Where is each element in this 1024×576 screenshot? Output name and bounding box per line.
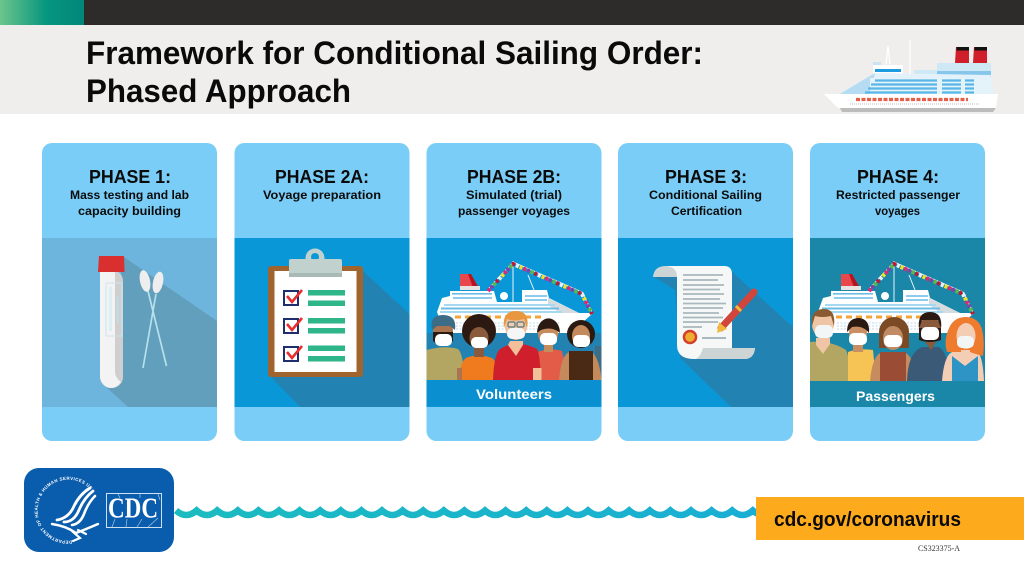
label band: volunteers: Volunteers <box>476 386 552 402</box>
label band: passengers: Passengers <box>856 388 935 404</box>
person: rust dress <box>870 317 916 381</box>
document code: CS323375-A <box>918 544 960 553</box>
title: Framework for Conditional Sailing Order: <box>86 35 703 71</box>
website callout: cdc.gov/coronavirus <box>774 509 961 531</box>
person: red curly hair <box>942 317 984 381</box>
description: phase 1 <box>70 190 189 218</box>
person: navy shirt <box>907 312 950 381</box>
illustration: cruise ship with flags <box>818 261 974 333</box>
description: phase 3 <box>649 190 762 218</box>
illustration: masked volunteers <box>426 311 602 380</box>
title <box>86 35 703 109</box>
HHS seal text: DEPARTMENT OF HEALTH & HUMAN SERVICES USA <box>34 476 92 544</box>
description: phase 2B: passenger voyages <box>458 206 570 218</box>
panel: phase 4 <box>810 143 985 441</box>
person: dark dress <box>559 320 602 380</box>
description: phase 2B <box>458 190 570 218</box>
description: phase 3: Certification <box>671 206 742 218</box>
heading: phase 2A: PHASE 2A: <box>275 167 369 187</box>
heading: phase 3: PHASE 3: <box>665 167 747 187</box>
person: curly hair <box>457 314 499 380</box>
wave divider <box>176 510 773 515</box>
person: turban <box>426 315 465 380</box>
panel: phase 2A <box>234 143 410 441</box>
description: phase 2B: Simulated (trial) <box>466 190 562 202</box>
heading: phase 1: PHASE 1: <box>89 167 171 187</box>
heading: phase 4: PHASE 4: <box>857 167 939 187</box>
header band <box>0 25 1024 114</box>
heading: phase 2B: PHASE 2B: <box>467 167 561 187</box>
icon: cruise ship header <box>824 40 998 112</box>
icon: HHS eagle <box>52 488 98 541</box>
illustration: cruise ship with flags <box>437 261 593 333</box>
person: olive shirt <box>810 309 850 381</box>
label band: volunteers <box>426 380 602 406</box>
person: red shirt <box>493 311 542 380</box>
panel: phase 2B <box>426 143 602 441</box>
person: coral shirt <box>536 318 569 380</box>
CDC mark: CDC <box>108 492 158 524</box>
illustration: masked passengers <box>810 309 984 381</box>
description: phase 4: voyages <box>875 206 920 218</box>
description: phase 3: Conditional Sailing <box>649 190 762 202</box>
description: phase 4: Restricted passenger <box>836 190 961 202</box>
person: yellow shirt <box>847 318 876 381</box>
shadow behind volunteers <box>426 333 602 380</box>
website callout <box>756 497 1024 540</box>
panel: phase 3 <box>618 143 793 441</box>
description: phase 1: Mass testing and lab <box>70 190 189 202</box>
icon: clipboard checklist <box>268 248 410 407</box>
description: phase 4 <box>836 190 961 218</box>
panel: phase 1 <box>42 143 217 441</box>
top bar <box>0 0 1024 25</box>
icon: test tube and swabs <box>98 256 217 407</box>
description: phase 1: capacity building <box>78 206 181 218</box>
title: Phased Approach <box>86 73 351 109</box>
description: phase 2A: Voyage preparation <box>263 190 381 202</box>
icon: scroll certificate and pen <box>653 266 793 407</box>
CDC logo <box>24 468 174 552</box>
